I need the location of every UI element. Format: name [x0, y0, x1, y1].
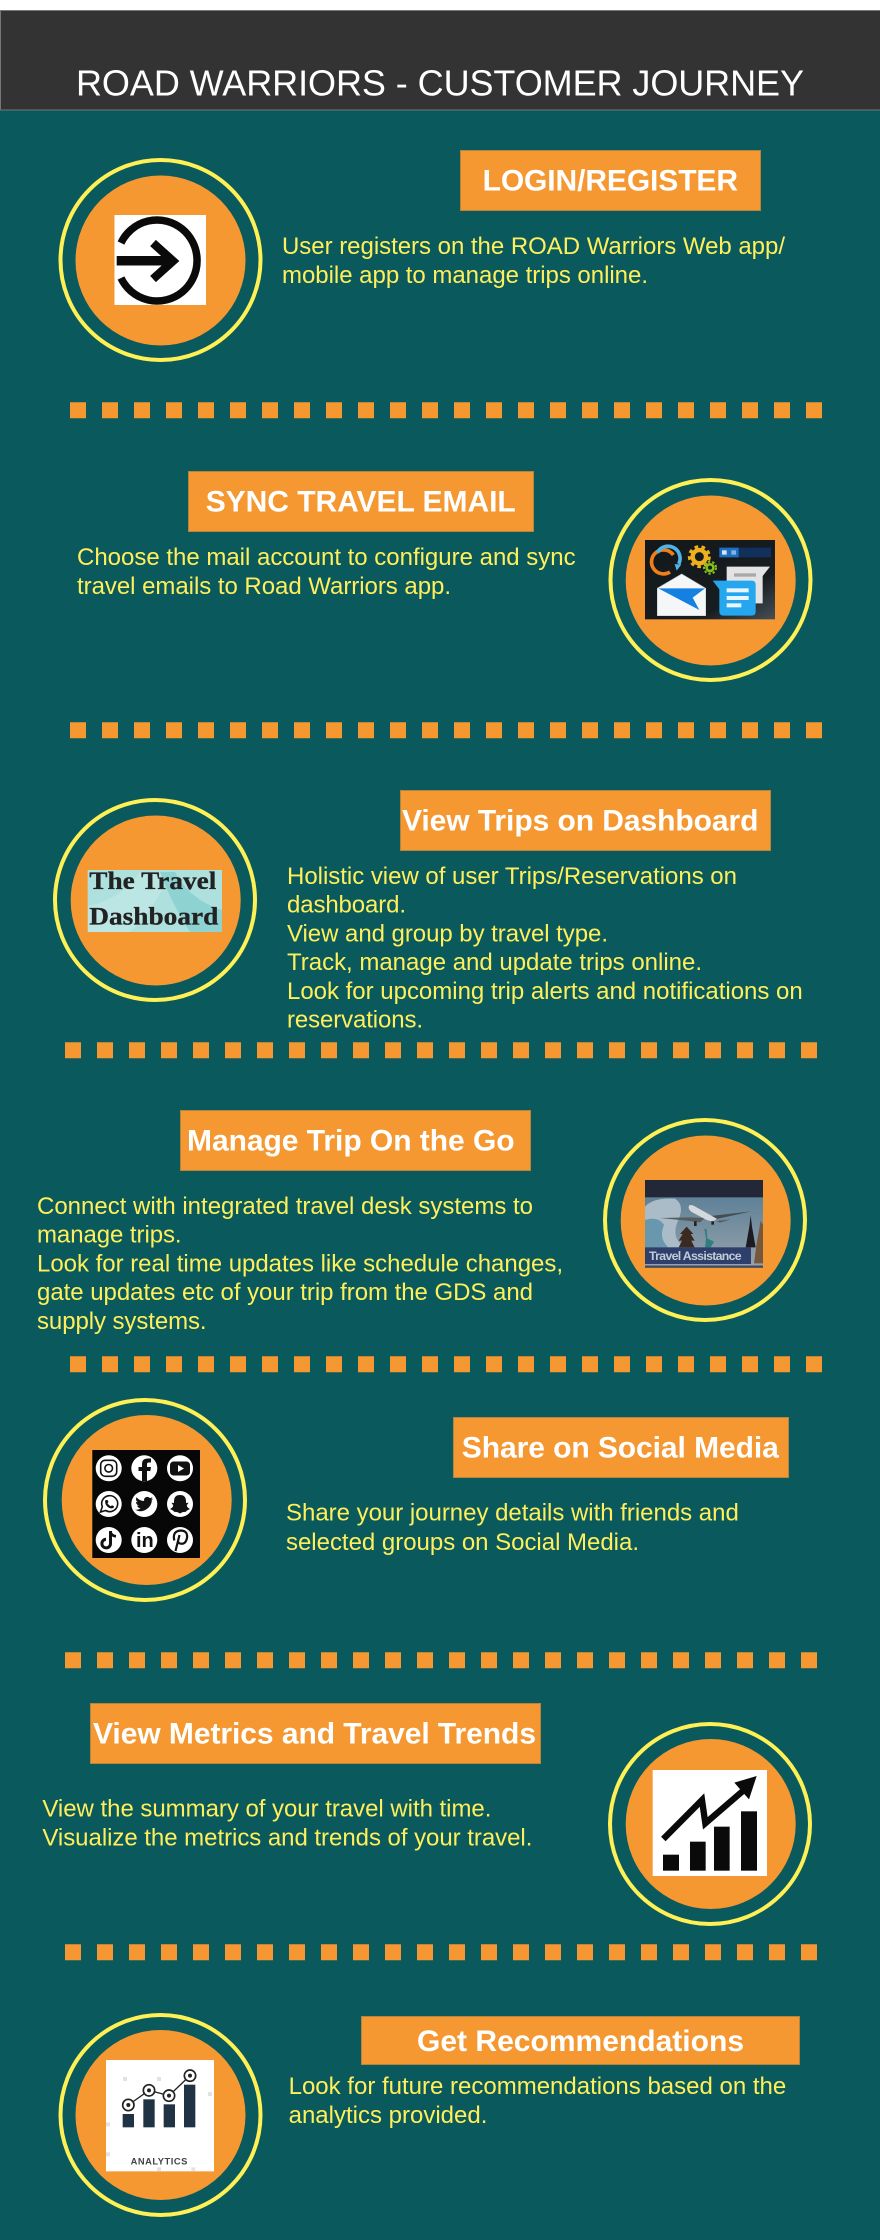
heading: get recommendations — [362, 2016, 800, 2064]
text: dashboard description: View and group by travel type. — [287, 921, 608, 948]
icon: snapchat — [170, 1495, 190, 1514]
text: share description: Share your journey details with friends and — [286, 1500, 739, 1527]
text: manage trip description: Connect with integrated travel desk systems to — [37, 1193, 533, 1220]
text: metrics description: View the summary of your travel with time. — [42, 1796, 491, 1823]
text: manage trip description: gate updates etc of your trip from the GDS and — [37, 1279, 533, 1306]
icon: growth chart in ringed circle — [610, 1724, 810, 1924]
header banner — [0, 10, 880, 110]
panel: login/register — [60, 150, 785, 360]
text: share description — [286, 1500, 739, 1556]
panel: share on social media — [45, 1400, 788, 1600]
panel: sync travel email — [77, 472, 810, 680]
text: sync description: Choose the mail account to configure and sync — [77, 544, 576, 571]
icon: tiktok — [102, 1531, 116, 1548]
text: metrics description — [42, 1796, 532, 1852]
text: metrics description: Visualize the metrics and trends of your travel. — [42, 1825, 532, 1852]
icon: login arrow in ringed circle — [60, 160, 260, 360]
heading: share on social media: Share on Social Media — [462, 1431, 779, 1464]
text: sync description — [77, 544, 576, 600]
heading: view metrics and travel trends — [90, 1704, 540, 1764]
heading: manage trip on the go — [180, 1110, 530, 1170]
icon: facebook — [138, 1458, 151, 1481]
icon: travel assistance in ringed circle — [605, 1120, 805, 1320]
icon: linkedin: in — [136, 1530, 154, 1552]
text: recommendations description — [289, 2073, 786, 2129]
heading: share on social media — [454, 1418, 788, 1478]
panel: view metrics and travel trends — [42, 1704, 810, 1924]
heading: get recommendations: Get Recommendations — [417, 2025, 744, 2058]
heading: manage trip on the go: Manage Trip On the Go — [187, 1125, 515, 1158]
icon: youtube — [170, 1462, 190, 1476]
heading: view trips on dashboard: View Trips on Dashboard — [402, 805, 758, 838]
icon: travel dashboard in ringed circle: Dashboard — [89, 903, 218, 930]
heading: sync travel email — [188, 472, 534, 532]
text: share description: selected groups on Social Media. — [286, 1529, 639, 1556]
text: dashboard description — [287, 863, 803, 1034]
text: recommendations description: Look for future recommendations based on the — [289, 2073, 786, 2100]
text: dashboard description: reservations. — [287, 1007, 423, 1034]
text: manage trip description: manage trips. — [37, 1222, 182, 1249]
text: manage trip description: supply systems. — [37, 1308, 207, 1335]
icon: analytics in ringed circle: ANALYTICS — [131, 2156, 187, 2166]
heading: login/register — [460, 150, 760, 210]
icon: travel assistance in ringed circle: Travel Assistance — [649, 1249, 742, 1263]
heading: sync travel email: SYNC TRAVEL EMAIL — [206, 486, 516, 519]
heading: view trips on dashboard — [400, 790, 770, 850]
icon: instagram — [101, 1460, 117, 1476]
panel: view trips on dashboard — [55, 790, 803, 1034]
text: recommendations description: analytics provided. — [289, 2102, 487, 2129]
icon: travel dashboard in ringed circle: The Travel — [89, 868, 216, 895]
title: ROAD WARRIORS - CUSTOMER JOURNEY — [76, 63, 804, 104]
icon: whatsapp — [100, 1496, 118, 1512]
icon: twitter — [135, 1497, 154, 1511]
text: dashboard description: dashboard. — [287, 892, 406, 919]
text: sync description: travel emails to Road Warriors app. — [77, 573, 451, 600]
icon: analytics in ringed circle — [60, 2015, 260, 2215]
text: login description: User registers on the ROAD Warriors Web app/ — [282, 233, 785, 260]
icon: email sync in ringed circle — [610, 480, 810, 680]
heading: view metrics and travel trends: View Metrics and Travel Trends — [93, 1717, 536, 1750]
text: dashboard description: Track, manage and update trips online. — [287, 949, 702, 976]
icon: social media grid in ringed circle — [45, 1400, 245, 1600]
panel: manage trip on the go — [37, 1110, 805, 1335]
panel: get recommendations — [60, 2015, 800, 2215]
text: login description: mobile app to manage trips online. — [282, 262, 648, 289]
icon: pinterest — [174, 1530, 187, 1551]
icon: travel dashboard in ringed circle — [55, 800, 255, 1000]
text: manage trip description: Look for real time updates like schedule changes, — [37, 1251, 563, 1278]
text: dashboard description: Holistic view of user Trips/Reservations on — [287, 863, 737, 890]
heading: login/register: LOGIN/REGISTER — [483, 165, 738, 198]
text: manage trip description — [37, 1193, 563, 1335]
text: login description — [282, 233, 785, 289]
text: dashboard description: Look for upcoming trip alerts and notifications on — [287, 978, 803, 1005]
